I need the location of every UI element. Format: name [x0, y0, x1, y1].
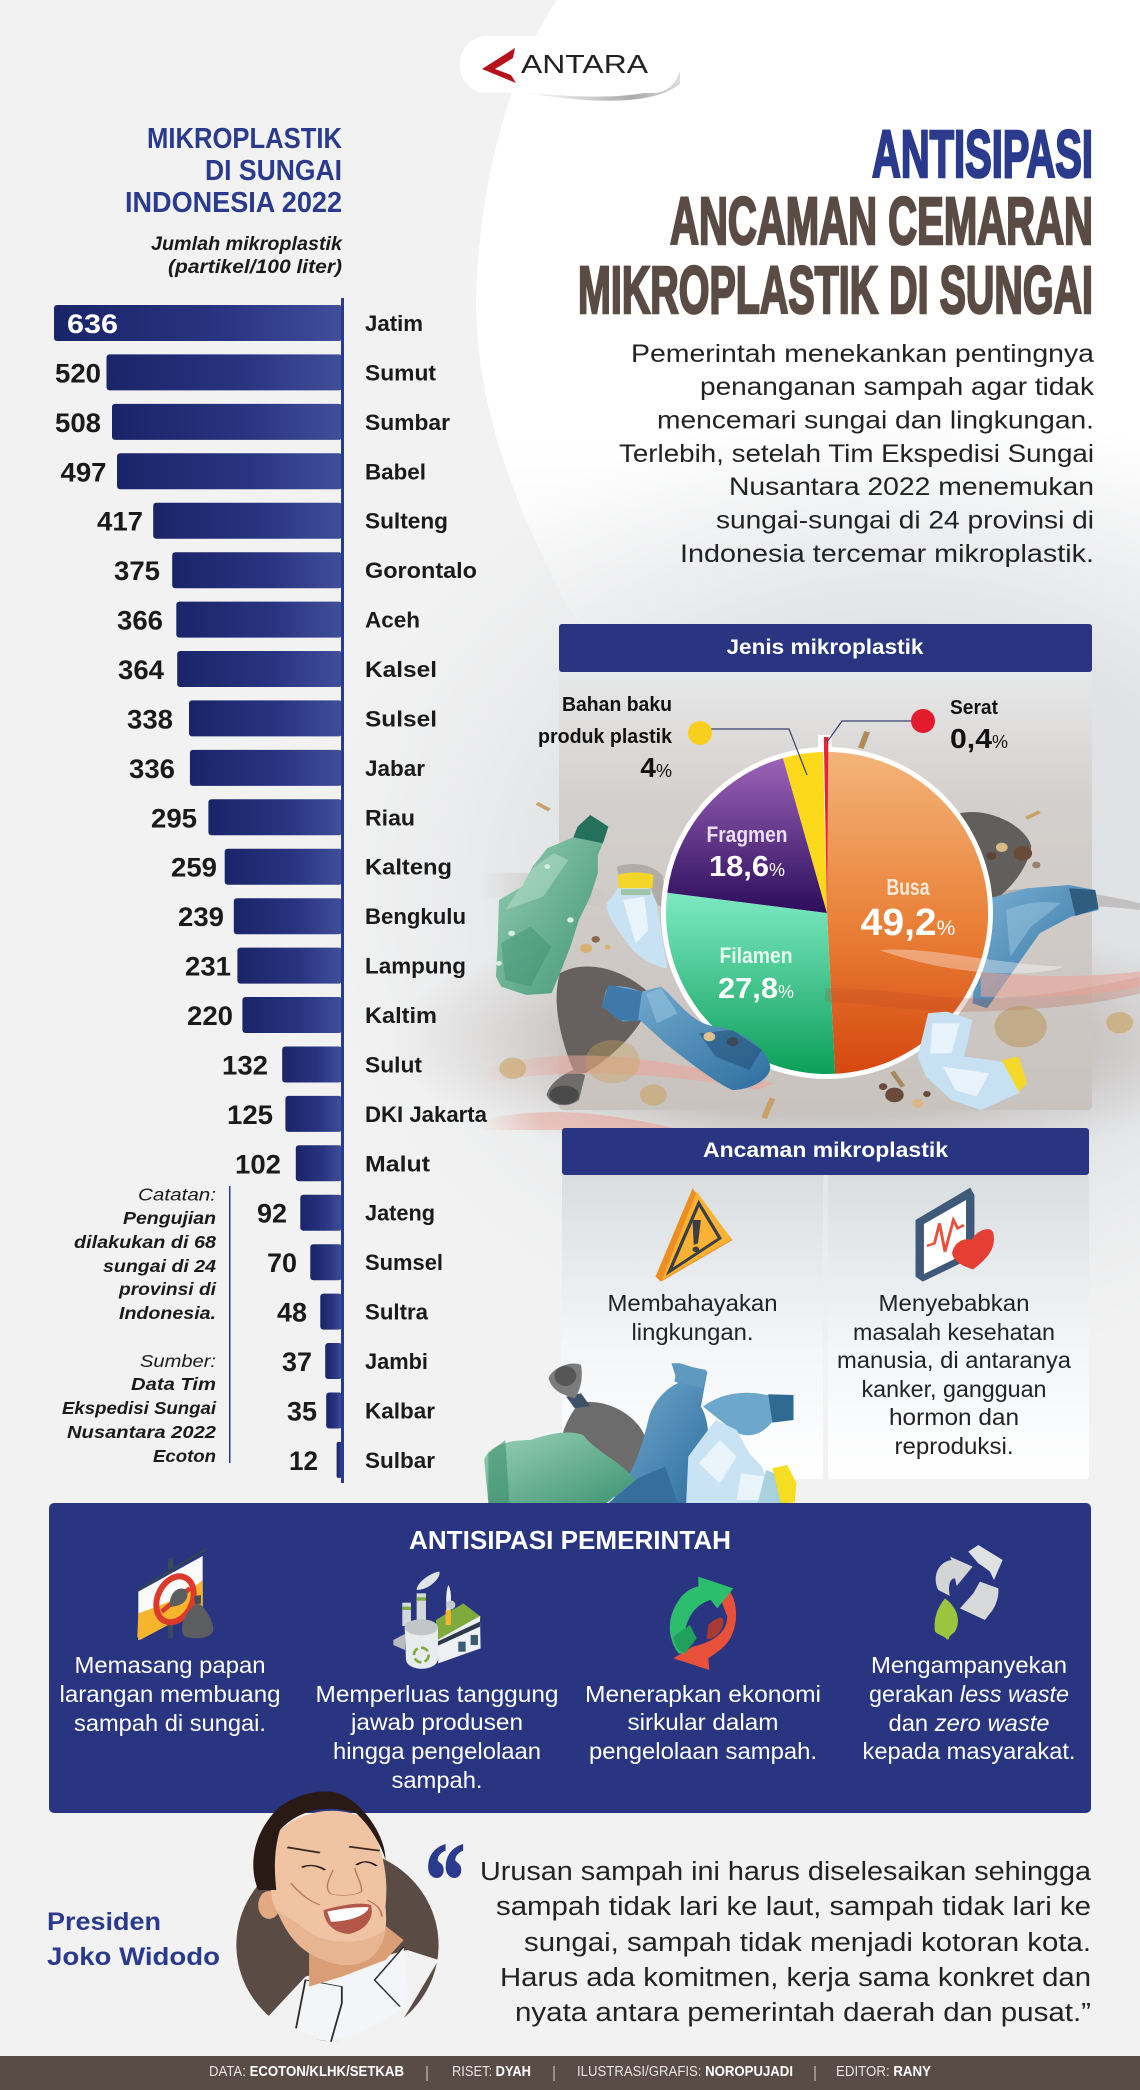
bar: Sultra	[277, 1294, 429, 1330]
icon: no littering sign	[137, 1547, 213, 1640]
pie chart	[661, 735, 993, 1079]
bar: Gorontalo	[114, 552, 477, 588]
footer credits: ILUSTRASI/GRAFIS: NOROPUJADI	[577, 2064, 793, 2080]
bar: Kalsel: 364	[118, 655, 164, 685]
bar: Aceh: Aceh	[365, 608, 420, 633]
label: Bahan baku produk plastik: produk plastik	[538, 726, 673, 748]
front litter illustration	[480, 732, 1140, 1130]
notes and source: Ekspedisi Sungai	[62, 1398, 217, 1418]
bar: Sulut: 132	[222, 1050, 268, 1080]
quote text	[480, 1858, 1092, 2027]
notes and source: Pengujian	[123, 1208, 216, 1228]
chart unit note: Jumlah mikroplastik	[151, 234, 343, 255]
bar: Sumsel: Sumsel	[365, 1250, 443, 1275]
notes and source	[62, 1185, 230, 1466]
bar: Jatim	[54, 305, 423, 341]
bar chart	[54, 298, 488, 1483]
slice: Serat	[824, 737, 828, 913]
intro text: Terlebih, setelah Tim Ekspedisi Sungai	[619, 440, 1094, 468]
bar: Jatim: Jatim	[365, 311, 423, 336]
notes and source: Indonesia.	[119, 1303, 216, 1323]
chart heading: DI SUNGAI	[205, 155, 342, 187]
header: ancaman mikroplastik: Ancaman mikroplastik	[703, 1138, 948, 1162]
bar: Sulteng: Sulteng	[365, 509, 448, 534]
text: ekonomi sirkular	[585, 1681, 821, 1764]
bar: Sumsel: 70	[267, 1248, 297, 1278]
title	[578, 117, 1093, 328]
speaker name: Joko Widodo	[47, 1943, 220, 1971]
bar: Riau: 295	[151, 803, 197, 833]
bar: Jabar: 336	[129, 754, 175, 784]
label: Bahan baku produk plastik: Bahan baku	[562, 694, 672, 716]
icon: circular arrows	[670, 1577, 736, 1670]
label: Serat: 0,4%	[950, 723, 1008, 754]
intro text	[619, 340, 1095, 568]
label: Filamen: Filamen	[720, 943, 792, 968]
icon: heart monitor	[916, 1188, 994, 1282]
header: jenis mikroplastik: Jenis mikroplastik	[726, 635, 924, 659]
text: menyebabkan masalah kesehatan	[837, 1290, 1072, 1459]
speaker name: Presiden	[47, 1908, 161, 1936]
bar: Sumsel	[267, 1244, 443, 1280]
panel: antisipasi pemerintah	[49, 1503, 1091, 1813]
icon: factory	[393, 1572, 481, 1669]
logo: ANTARA	[460, 36, 680, 101]
text: memperluas tanggung jawab: sampah.	[392, 1767, 482, 1793]
bar: Sultra: 48	[277, 1298, 307, 1328]
back litter illustration	[480, 812, 1140, 1105]
label: Serat: Serat	[950, 697, 998, 719]
bar: Gorontalo: 375	[114, 556, 160, 586]
bar: Gorontalo: Gorontalo	[365, 558, 477, 583]
label: Busa	[861, 874, 955, 944]
chart heading	[125, 123, 342, 219]
text: menyebabkan masalah kesehatan: Menyebabkan	[878, 1290, 1030, 1316]
label: Filamen: 27,8%	[718, 973, 794, 1005]
text: ekonomi sirkular: Menerapkan ekonomi	[585, 1681, 821, 1707]
card: kesehatan	[828, 1175, 1089, 1479]
label: Bahan baku produk plastik: 4%	[640, 752, 672, 783]
notes and source: Ecoton	[153, 1446, 216, 1466]
bar: Sulsel: Sulsel	[365, 706, 437, 731]
bar: Lampung: 231	[185, 952, 231, 982]
icon: recycle and leaf	[935, 1545, 1003, 1639]
bar: Kaltim: Kaltim	[365, 1003, 437, 1028]
text: membahayakan lingkungan: Membahayakan	[608, 1290, 778, 1316]
bar: Sumbar: 508	[55, 408, 101, 438]
footer credits: DATA: ECOTON/KLHK/SETKAB	[209, 2064, 404, 2080]
bar: Sulut: Sulut	[365, 1052, 423, 1078]
text: memperluas tanggung jawab: hingga pengelolaan	[333, 1738, 541, 1764]
quote text: nyata antara pemerintah daerah dan pusat.”	[515, 1999, 1091, 2027]
panel: jenis mikroplastik	[480, 624, 1140, 1130]
bar: Aceh	[117, 602, 420, 638]
label: Filamen	[718, 943, 794, 1005]
label: Fragmen: 18,6%	[709, 851, 785, 883]
bar: Babel: 497	[60, 457, 106, 487]
text: kampanye less waste	[862, 1652, 1076, 1764]
slice: Filamen	[666, 893, 835, 1074]
intro text: Pemerintah menekankan pentingnya	[631, 340, 1094, 368]
callout line: Bahan baku	[688, 721, 807, 775]
card: lingkungan	[562, 1175, 823, 1479]
header: ancaman mikroplastik	[562, 1128, 1089, 1175]
bar: Sumut	[55, 354, 437, 390]
logo: ANTARA: ANTARA	[521, 49, 649, 79]
bar: Kalteng: 259	[171, 853, 217, 883]
text: kampanye less waste: dan zero waste	[888, 1710, 1050, 1736]
text: memasang papan	[60, 1652, 280, 1736]
text: kampanye less waste: gerakan less waste	[869, 1681, 1069, 1707]
intro text: mencemari sungai dan lingkungan.	[657, 406, 1094, 434]
bar: Babel: Babel	[365, 459, 426, 484]
bar: Sumut: Sumut	[365, 360, 437, 385]
intro text: sungai-sungai di 24 provinsi di	[716, 506, 1094, 534]
notes and source: Sumber:	[140, 1351, 216, 1371]
text: menyebabkan masalah kesehatan: reproduksi.	[894, 1433, 1014, 1459]
bar: Bengkulu: Bengkulu	[365, 904, 466, 929]
bar: DKI Jakarta: DKI Jakarta	[365, 1102, 488, 1127]
text: memasang papan: larangan membuang	[60, 1681, 280, 1707]
text: menyebabkan masalah kesehatan: manusia, di antaranya	[837, 1347, 1072, 1373]
bar: Kalbar: 35	[287, 1396, 317, 1426]
text: menyebabkan masalah kesehatan: masalah kesehatan	[853, 1319, 1055, 1345]
slice: Busa	[827, 752, 988, 1074]
bar: Lampung: Lampung	[365, 954, 466, 979]
bar: Bengkulu	[178, 898, 466, 934]
label: Busa: 49,2%	[861, 902, 955, 944]
bar: Jateng: Jateng	[365, 1201, 435, 1226]
bar: DKI Jakarta: 125	[227, 1100, 273, 1130]
label: Fragmen	[706, 822, 788, 883]
bar: Babel	[60, 453, 426, 489]
icon: warning triangle	[655, 1188, 732, 1282]
footer credits: EDITOR: RANY	[836, 2064, 931, 2080]
label: Fragmen: Fragmen	[706, 822, 788, 847]
quote text: sungai, sampah tidak menjadi kotoran kota.	[524, 1929, 1091, 1957]
bar: DKI Jakarta	[227, 1096, 488, 1132]
bar: Jambi: 37	[282, 1347, 312, 1377]
notes and source: provinsi di	[118, 1279, 217, 1299]
label: Busa: Busa	[886, 874, 930, 900]
quote text: sampah tidak lari ke laut, sampah tidak lari ke	[496, 1893, 1091, 1921]
bar: Sumbar: Sumbar	[365, 410, 450, 435]
bar: Riau	[151, 799, 415, 835]
heading: antisipasi pemerintah: ANTISIPASI PEMERINTAH	[409, 1525, 731, 1555]
illustration: plastic waste pile	[484, 1363, 796, 1503]
notes and source: Data Tim	[131, 1374, 216, 1394]
text: ekonomi sirkular: pengelolaan sampah.	[589, 1738, 817, 1764]
text: memperluas tanggung jawab: jawab produsen	[350, 1709, 523, 1735]
bar: Jateng: 92	[257, 1199, 287, 1229]
notes and source: sungai di 24	[103, 1256, 216, 1276]
speaker name	[47, 1908, 220, 1971]
bar: Kalsel	[118, 651, 437, 687]
bar: Kaltim: 220	[187, 1001, 233, 1031]
bar: Jambi	[282, 1343, 428, 1379]
bar: Aceh: 366	[117, 606, 163, 636]
bar: Sulteng: 417	[97, 507, 143, 537]
footer credits: RISET: DYAH	[452, 2064, 531, 2080]
bar: Kalteng	[171, 849, 452, 885]
header: jenis mikroplastik	[559, 624, 1092, 672]
bar: Sumut: 520	[55, 358, 101, 388]
callout line: Serat	[827, 709, 935, 742]
quote text: Harus ada komitmen, kerja sama konkret dan	[500, 1964, 1091, 1992]
intro text: Indonesia tercemar mikroplastik.	[680, 540, 1094, 568]
bar: Sultra: Sultra	[365, 1300, 429, 1325]
bar: Jatim: 636	[67, 309, 118, 339]
bar: Malut	[235, 1145, 431, 1181]
text: memasang papan: Memasang papan	[74, 1652, 266, 1678]
bar: Sulut	[222, 1046, 423, 1082]
slice: Fragmen	[667, 758, 827, 913]
text: kampanye less waste: Mengampanyekan	[871, 1652, 1067, 1678]
chart unit note: (partikel/100 liter)	[168, 257, 342, 278]
text: memasang papan: sampah di sungai.	[74, 1710, 266, 1736]
bar: Jateng	[257, 1195, 435, 1231]
footer credits	[0, 2056, 1140, 2090]
bar: Malut: Malut	[365, 1151, 431, 1176]
bar: Sulteng	[97, 503, 448, 539]
notes and source: dilakukan di 68	[74, 1232, 216, 1252]
bar: Sulsel	[127, 700, 437, 736]
portrait: Presiden Joko Widodo	[236, 1791, 439, 2042]
text: ekonomi sirkular: sirkular dalam	[628, 1709, 778, 1735]
bar: Sulbar: 12	[289, 1446, 318, 1476]
bar: Jabar	[129, 750, 425, 786]
text: kampanye less waste: kepada masyarakat.	[862, 1738, 1076, 1764]
panel: ancaman mikroplastik	[484, 1128, 1089, 1503]
bar: Jambi: Jambi	[365, 1349, 428, 1374]
bar: Kalsel: Kalsel	[365, 657, 437, 682]
bar: Kalteng: Kalteng	[365, 855, 452, 880]
bar: Kaltim	[187, 997, 437, 1033]
chart heading: INDONESIA 2022	[125, 187, 342, 219]
notes and source: Nusantara 2022	[67, 1422, 216, 1442]
chart unit note	[151, 234, 343, 278]
bar: Sumbar	[55, 404, 450, 440]
label: Serat	[950, 697, 1008, 754]
text: menyebabkan masalah kesehatan: kanker, gangguan	[862, 1376, 1046, 1402]
bar: Kalbar: Kalbar	[365, 1398, 435, 1424]
quotation mark: “	[425, 1821, 465, 1938]
bar: Lampung	[185, 948, 466, 984]
text: membahayakan lingkungan	[608, 1290, 778, 1345]
intro text: Nusantara 2022 menemukan	[729, 473, 1094, 501]
notes and source: Catatan:	[138, 1185, 216, 1205]
text: membahayakan lingkungan: lingkungan.	[632, 1319, 754, 1345]
bar: Jabar: Jabar	[365, 756, 425, 781]
bar: Riau: Riau	[365, 805, 415, 830]
text: menyebabkan masalah kesehatan: hormon dan	[889, 1404, 1019, 1430]
bar: Malut: 102	[235, 1149, 281, 1179]
quote text: Urusan sampah ini harus diselesaikan sehingga	[480, 1858, 1092, 1886]
bar: Sulsel: 338	[127, 704, 173, 734]
bar: Sulbar	[289, 1442, 435, 1478]
slice: Bahan baku	[783, 752, 827, 913]
chart heading: MIKROPLASTIK	[147, 123, 342, 155]
bar: Kalbar	[287, 1392, 435, 1428]
text: memperluas tanggung jawab: Memperluas tanggung	[316, 1681, 558, 1707]
text: memperluas tanggung jawab	[316, 1681, 558, 1793]
bar: Bengkulu: 239	[178, 902, 224, 932]
intro text: penanganan sampah agar tidak	[700, 373, 1095, 401]
bar: Sulbar: Sulbar	[365, 1448, 435, 1473]
label: Bahan baku produk plastik	[538, 694, 673, 783]
